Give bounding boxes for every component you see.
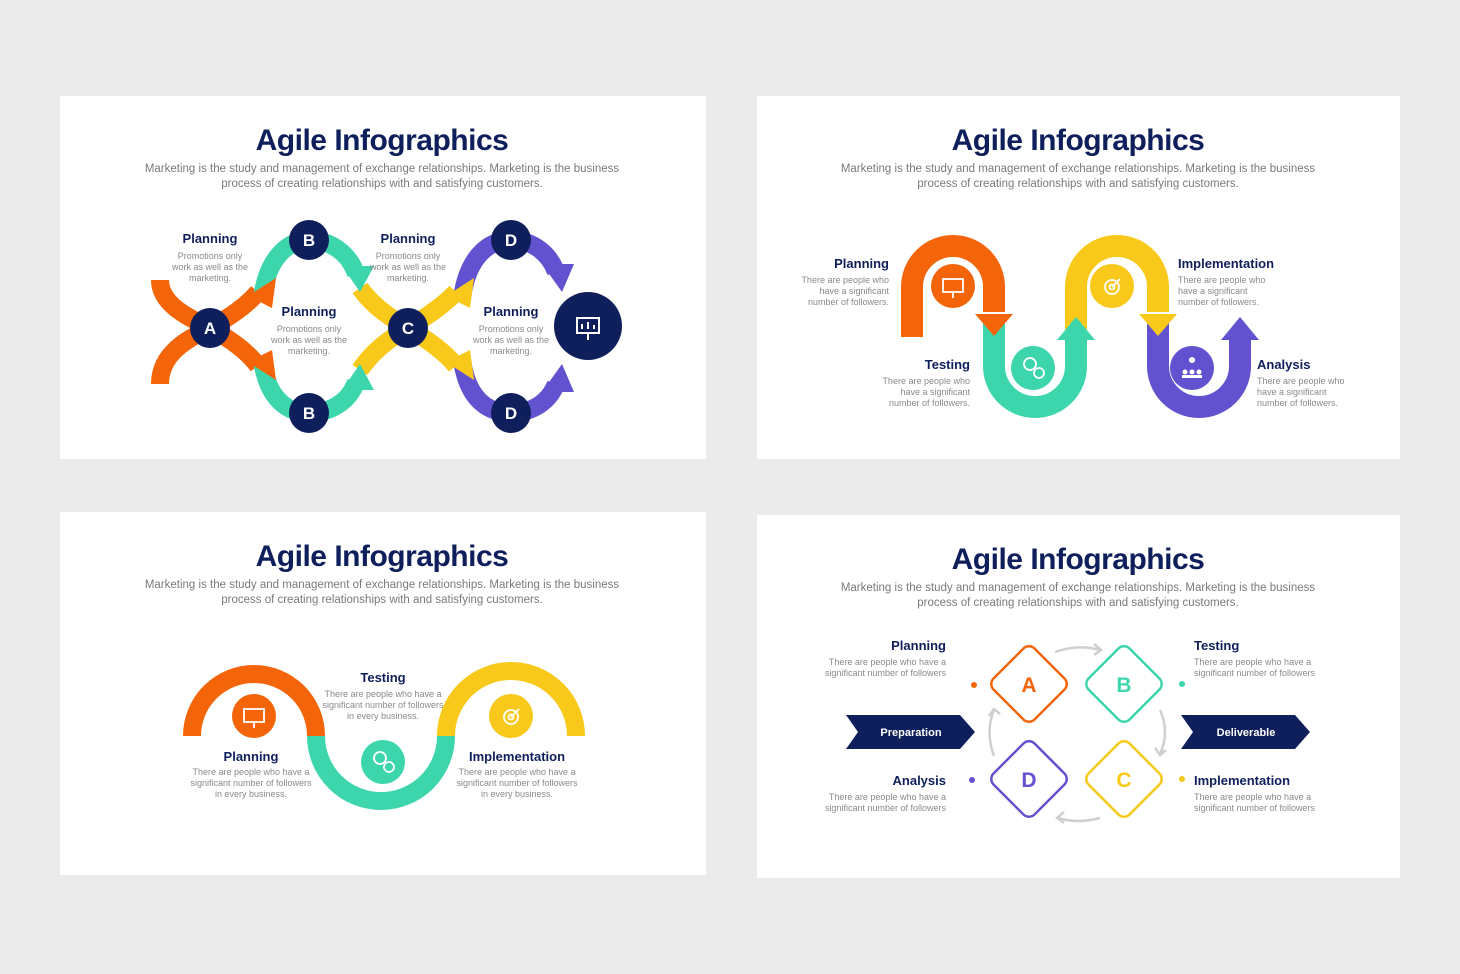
labels: in every business. <box>347 711 419 721</box>
panel: top-left cross diagram: D <box>505 404 517 423</box>
labels: Testing <box>360 670 406 685</box>
subtitle <box>145 163 619 190</box>
labels: Planning <box>891 638 946 653</box>
labels: Promotions only <box>479 324 544 334</box>
labels: in every business. <box>481 789 553 799</box>
labels: There are people who have a <box>192 767 310 777</box>
panel: top-left cross diagram: A <box>204 319 216 338</box>
labels: have a significant <box>1257 387 1327 397</box>
labels: Testing <box>925 357 970 372</box>
labels: Implementation <box>1178 256 1274 271</box>
labels: significant number of followers <box>456 778 578 788</box>
chevrons: Preparation <box>880 727 942 739</box>
panel: bottom-left wave <box>60 512 706 875</box>
panel: bottom-right diamonds: A <box>1021 674 1037 697</box>
chevrons: Deliverable <box>1217 727 1275 739</box>
labels: marketing. <box>288 346 330 356</box>
labels: Testing <box>1194 638 1239 653</box>
subtitle: process of creating relationships with and satisfying customers. <box>917 597 1239 609</box>
labels <box>190 670 578 799</box>
title: Agile Infographics <box>256 124 508 157</box>
nodes <box>190 220 622 433</box>
cycle arrows <box>989 644 1166 823</box>
labels: have a significant <box>900 387 970 397</box>
labels: marketing. <box>387 273 429 283</box>
snake path <box>912 246 1240 407</box>
panel: top-left cross diagram <box>60 96 706 459</box>
labels: There are people who <box>1257 376 1345 386</box>
labels: There are people who <box>882 376 970 386</box>
subtitle <box>841 163 1315 190</box>
labels: Planning <box>834 256 889 271</box>
labels: There are people who have a <box>829 792 946 802</box>
subtitle: Marketing is the study and management of exchange relationships. Marketing is the business <box>145 579 619 591</box>
labels: There are people who have a <box>829 657 946 667</box>
subtitle: Marketing is the study and management of exchange relationships. Marketing is the business <box>841 582 1315 594</box>
labels: There are people who have a <box>1194 792 1311 802</box>
labels: number of followers. <box>1178 297 1259 307</box>
subtitle <box>145 579 619 606</box>
labels: significant number of followers <box>322 700 444 710</box>
labels: work as well as the <box>171 262 248 272</box>
labels: Analysis <box>893 773 946 788</box>
labels: Planning <box>224 749 279 764</box>
labels: Promotions only <box>376 251 441 261</box>
title: Agile Infographics <box>256 540 508 573</box>
diagram: crossing arrows <box>160 240 556 413</box>
labels: marketing. <box>490 346 532 356</box>
labels: significant number of followers <box>190 778 312 788</box>
labels: significant number of followers <box>1194 803 1316 813</box>
labels: Promotions only <box>178 251 243 261</box>
labels: There are people who have a <box>1194 657 1311 667</box>
subtitle: process of creating relationships with and satisfying customers. <box>221 594 543 606</box>
labels: significant number of followers <box>1194 668 1316 678</box>
labels: number of followers. <box>808 297 889 307</box>
panel: bottom-right diamonds: B <box>1116 674 1132 697</box>
labels: work as well as the <box>472 335 549 345</box>
diamonds <box>988 643 1165 820</box>
labels: Analysis <box>1257 357 1310 372</box>
labels: in every business. <box>215 789 287 799</box>
wave <box>192 671 576 801</box>
subtitle <box>841 582 1315 609</box>
labels: number of followers. <box>1257 398 1338 408</box>
icon: presentation board <box>577 318 599 340</box>
subtitle: process of creating relationships with and satisfying customers. <box>221 178 543 190</box>
icons <box>232 694 533 784</box>
subtitle: process of creating relationships with and satisfying customers. <box>917 178 1239 190</box>
labels: Planning <box>183 231 238 246</box>
subtitle: Marketing is the study and management of exchange relationships. Marketing is the business <box>841 163 1315 175</box>
labels: Planning <box>282 304 337 319</box>
panel: top-left cross diagram: D <box>505 231 517 250</box>
panel: bottom-right diamonds <box>757 515 1400 878</box>
icons <box>931 264 1214 390</box>
labels: Promotions only <box>277 324 342 334</box>
chevrons <box>846 715 1310 749</box>
labels: There are people who have a <box>458 767 576 777</box>
panel: bottom-right diamonds: D <box>1021 769 1037 792</box>
labels: There are people who <box>1178 275 1266 285</box>
labels <box>801 256 1345 408</box>
dots <box>969 681 1185 783</box>
panel: top-right snake arrows <box>757 96 1400 459</box>
labels: work as well as the <box>270 335 347 345</box>
labels: number of followers. <box>889 398 970 408</box>
labels: Implementation <box>1194 773 1290 788</box>
labels <box>171 231 549 356</box>
labels: have a significant <box>1178 286 1248 296</box>
labels: significant number of followers <box>825 668 946 678</box>
labels: There are people who have a <box>324 689 442 699</box>
labels: have a significant <box>819 286 889 296</box>
subtitle: Marketing is the study and management of exchange relationships. Marketing is the business <box>145 163 619 175</box>
labels: Planning <box>484 304 539 319</box>
labels: significant number of followers <box>825 803 946 813</box>
title: Agile Infographics <box>952 543 1204 576</box>
labels <box>825 638 1316 813</box>
labels: Planning <box>381 231 436 246</box>
title: Agile Infographics <box>952 124 1204 157</box>
labels: work as well as the <box>369 262 446 272</box>
panel: top-left cross diagram: C <box>402 319 414 338</box>
labels: Implementation <box>469 749 565 764</box>
panel: top-left cross diagram: B <box>303 404 315 423</box>
labels: There are people who <box>801 275 889 285</box>
panel: top-left cross diagram: B <box>303 231 315 250</box>
panel: bottom-right diamonds: C <box>1116 769 1132 792</box>
labels: marketing. <box>189 273 231 283</box>
